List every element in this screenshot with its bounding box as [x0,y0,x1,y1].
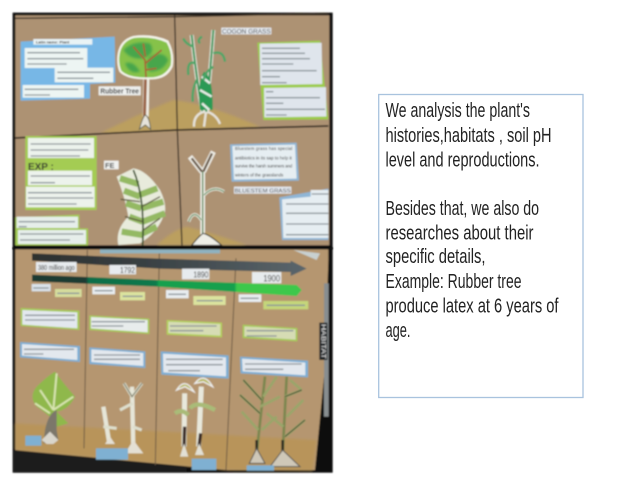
labels: soil pH tags [32,284,308,309]
photo: plant posters, four quadrants [13,13,333,249]
text box: analysis description: specific details, [386,245,486,268]
panel: rubber tree information [21,37,115,101]
text box: analysis description: Besides that, we also do [386,197,539,220]
icon: young plants 1792 [103,383,143,453]
label: tag under flowering plants [192,459,216,470]
arrow: timeline [32,253,307,276]
panel: fern information [15,136,97,245]
label: tag under ancient plant [25,436,41,446]
label: FE [104,161,119,170]
panel: habitat notes (green) [21,308,297,341]
label: 1792: 1792 [120,265,135,275]
icon: rubber tree [117,35,173,129]
text box: analysis description: Example: Rubber tree [386,270,522,293]
panel: bluestem grass information [230,143,328,240]
panel: reproduction notes (blue) [20,342,308,379]
label: FE: FE [105,161,114,170]
label: Cogon Grass: COGON GRASS [222,29,271,35]
label: 1792 [109,265,136,275]
label: 1890 [182,269,209,279]
panel: bluestem grass information: antibiotics in its sap to help it [235,155,292,160]
text box: analysis description: researches about their [386,222,534,244]
label: EXP: EXP : [28,162,54,173]
text box: analysis description: histories,habitats , soil pH [386,124,552,147]
label: Bluestem Grass: BLUESTEM GRASS [235,188,291,194]
icon: bluestem grass [189,152,224,245]
panel: cogon grass information [257,41,328,120]
label: 1890: 1890 [193,269,209,279]
label: 380 million ago: 380 million ago [38,263,75,272]
text box: analysis description: level and reproductions. [386,148,540,172]
label: side tags, Habitat: HABITAT [319,324,325,359]
panel: bluestem grass information: winters of the grasslands [235,173,283,178]
icon: fern [117,168,165,245]
arrow: green timeline [32,275,302,296]
icon: ancient plant [32,372,75,444]
text box: analysis description: produce latex at 6 years of [386,294,559,318]
label: side tags, Habitat [319,283,329,417]
icon: flowering plants 1890 [175,378,215,457]
text box: analysis description: age. [386,319,410,342]
label: 1900: 1900 [263,273,280,283]
icon: cogon grass [183,30,225,127]
text box: analysis description [379,94,583,398]
panel: rubber tree information: Latin name: Plant [36,40,70,45]
label: tag under young plants [96,448,128,460]
panel: bluestem grass information: Bluestem grass has special [235,146,292,151]
icon: tall plants 1900 [240,377,305,467]
panel: bluestem grass information: survive the harsh summers and [235,164,293,169]
label: tag under tall plants [247,465,274,471]
label: 380 million ago [36,262,77,272]
photo: plant timeline poster [13,247,333,473]
label: 1900 [252,272,281,283]
label: Rubber Tree: Rubber Tree [100,87,139,96]
text box: analysis description: We analysis the plant's [386,99,530,122]
